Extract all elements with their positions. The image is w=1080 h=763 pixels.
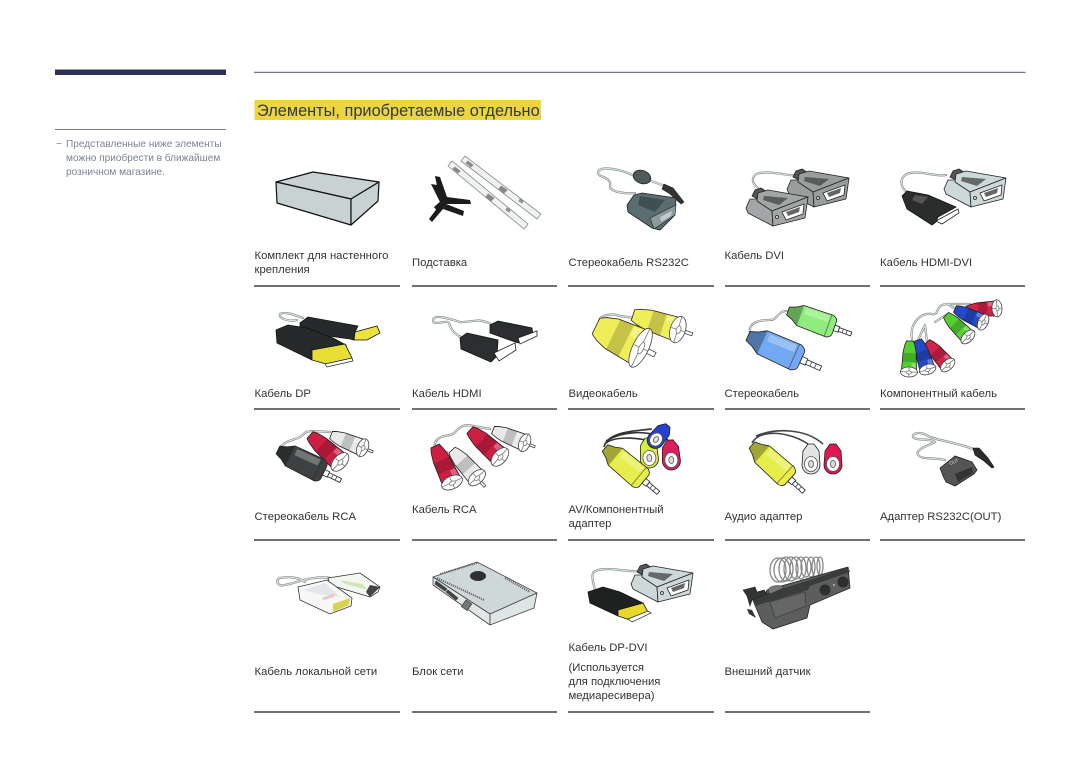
sidebar note: − [56,139,62,150]
icon: RS232C OUT adapter: OUT [949,458,959,466]
panel: HDMI-DVI cable [880,169,1025,286]
icon: AV adapter [597,420,681,502]
sidebar note: Представленные ниже элементы [66,139,222,150]
label [568,642,660,702]
label: Подставка [412,257,468,269]
panel: network box [412,562,557,712]
label: (Используется [568,662,644,674]
label: Кабель DP [254,388,311,400]
label: Аудио адаптер [724,511,802,523]
label: Внешний датчик [724,666,811,678]
label [568,504,664,530]
icon: LAN plugs [277,573,380,614]
sidebar note: розничном магазине. [66,167,165,178]
icon: box [276,172,379,225]
panel: stereo cable [724,300,870,409]
label [254,250,388,276]
icon: blue and green jacks [742,300,855,381]
icon: component plugs [900,300,1002,377]
label: AV/Компонентный [568,504,664,516]
icon: sensor with coil [743,557,850,629]
panel: video cable [568,302,714,409]
panel: external sensor [724,557,870,712]
icon: RCA plugs [425,421,538,493]
label: Компонентный кабель [880,388,997,400]
icon: audio adapter [744,431,842,500]
panel: HDMI cable [412,317,557,409]
icon: RS232C cable [598,168,684,230]
icon: stereo RCA plugs [273,426,376,491]
panel: DVI cable [724,169,870,286]
panel: DP-DVI cable [568,564,714,712]
icon: HDMI and DVI connectors [901,169,1006,225]
title: Элементы, приобретаемые отдельно [257,102,540,120]
label: Кабель DVI [724,250,784,262]
icon: RS232C OUT adapter [913,433,994,486]
label: Стереокабель RCA [254,511,356,523]
label: крепления [254,264,310,276]
panel: wall mount kit [254,172,400,286]
label: Кабель RCA [412,504,477,516]
sidebar note: можно приобрести в ближайшем [66,152,220,164]
label: Кабель DP-DVI [568,642,648,654]
panel: DP cable [254,313,400,409]
label: Кабель HDMI-DVI [880,257,972,269]
panel: RS232C OUT adapter [880,433,1025,540]
label: Стереокабель [724,388,799,400]
icon: DVI connectors [746,169,849,226]
label: Блок сети [412,666,463,678]
icon: yellow RCA plugs [587,302,696,374]
icon: network box [433,562,537,625]
main top rule [254,72,1026,73]
sidebar top bar [55,70,226,75]
label: Кабель HDMI [412,388,482,400]
label: Комплект для настенного [254,250,388,262]
label: Видеокабель [568,388,638,400]
panel: component cable [880,300,1025,409]
panel: stand [412,156,557,286]
label: Стереокабель RS232C [568,257,689,269]
panel: audio adapter [724,431,870,540]
icon: stand rods and tripod [429,156,541,229]
label: Адаптер RS232C(OUT) [880,511,1002,523]
panel: AV component adapter [568,420,714,540]
panel: RS232C stereo cable [568,168,714,286]
sidebar note [55,129,226,178]
icon: HDMI connectors [433,317,537,362]
label: Кабель локальной сети [254,666,377,678]
label: медиаресивера) [568,690,655,702]
panel: stereo RCA cable [254,426,400,540]
icon: DP connectors [276,313,380,367]
icon: DP and DVI connectors [588,564,693,622]
panel: RCA cable [412,421,557,540]
label: адаптер [568,518,611,530]
label: для подключения [568,676,660,688]
panel: LAN cable [254,573,400,712]
